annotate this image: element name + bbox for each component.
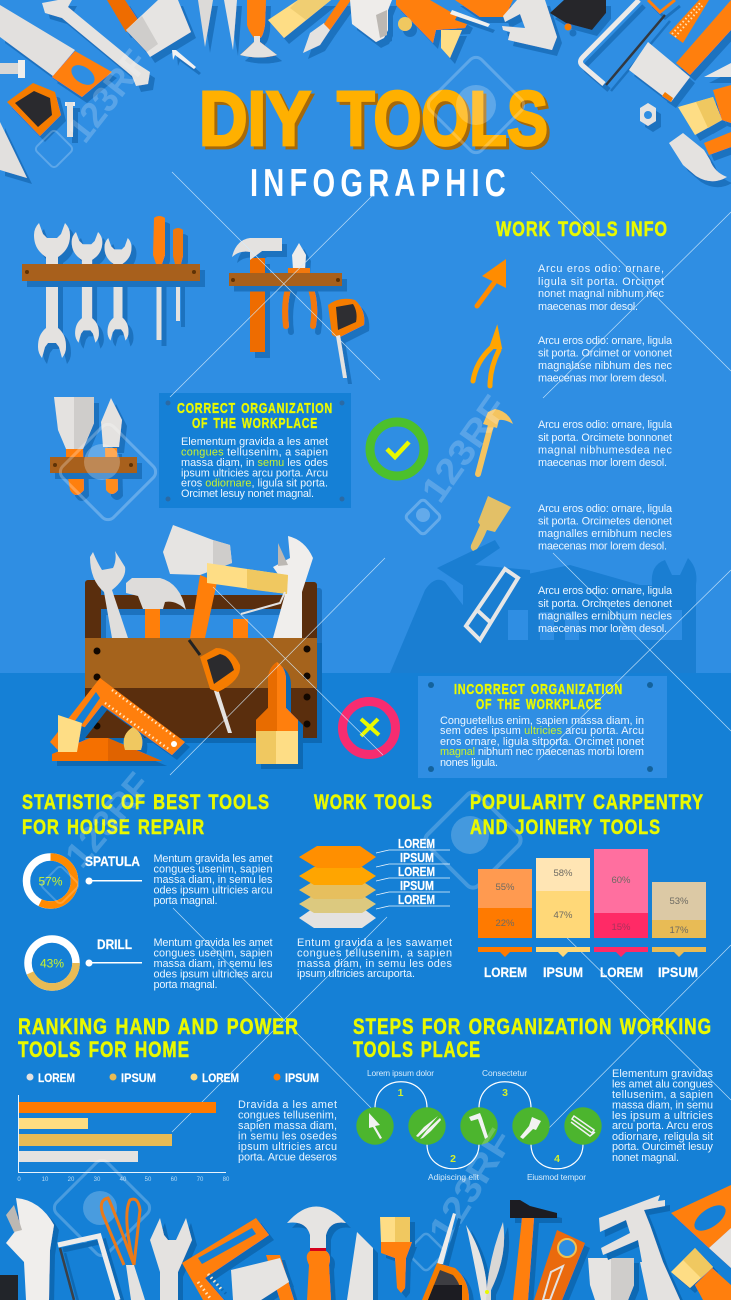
icon: brush bottom-right (671, 1248, 731, 1300)
category labels: IPSUM (543, 964, 583, 980)
icon: level bottom (534, 1230, 585, 1300)
icon: pliers blades (198, 0, 237, 50)
icon: axe top-right (629, 0, 731, 102)
tool rack: spatula and trowel (50, 397, 137, 495)
stacked bar 1: 22% (495, 918, 515, 929)
text: ranking description (238, 1099, 338, 1164)
watermark: camera diamond top (425, 54, 527, 156)
category labels: LOREM (484, 964, 527, 980)
step labels: Lorem ipsum dolor (367, 1068, 434, 1078)
watermark lines (170, 172, 731, 1135)
icon: paint roller (268, 0, 331, 38)
text: tool info 3: sit porta. Orcimete bonnonet (538, 432, 672, 444)
text: drill description: porta magnal. (154, 979, 218, 991)
text: spatula description: odes ipsum ultricies arcu (154, 884, 272, 896)
text: tool info 1 (538, 263, 665, 313)
text: steps description: les ipsum a ultricies (612, 1110, 714, 1122)
icon: ruler top (669, 0, 709, 43)
stacked bar 4 (652, 882, 706, 938)
icon: adjustable wrench in box (273, 536, 313, 638)
label: drill (86, 936, 142, 966)
text: tool info 2 (538, 335, 673, 384)
text: steps description: Elementum gravidas (612, 1068, 714, 1080)
stacked bar 1 (478, 869, 532, 938)
stacked bar 2 (536, 858, 590, 938)
heading: ranking (18, 1014, 299, 1062)
layer labels with leaders: IPSUM (400, 879, 434, 893)
category tabs (478, 947, 706, 957)
heading: ranking: RANKING HAND AND POWER (18, 1014, 299, 1039)
title: DIY Tools: DIY (202, 79, 314, 165)
icon: tape measure top-left (7, 83, 75, 137)
step numbers: 2 (450, 1153, 456, 1165)
icon: axe in box (163, 525, 232, 638)
layered hexagon chart (299, 846, 376, 928)
icon: spatula bottom (588, 1258, 634, 1300)
icon: caliper bottom (599, 1195, 680, 1300)
icon: scraper (240, 0, 277, 58)
icon: brush bottom (380, 1217, 412, 1293)
text: spatula description: porta magnal. (154, 895, 218, 907)
text: tool info 5: Arcu eros odio: ornare, ligula (538, 585, 673, 597)
text: tool info 1: nonet magnal nibhum nec (538, 288, 665, 300)
watermark: 123RF center: 123RF (413, 388, 515, 510)
step numbers: 4 (554, 1153, 560, 1165)
icon: wrench bottom (150, 1218, 192, 1300)
donut chart: spatula 57%: 57% (38, 874, 63, 888)
heading: steps: TOOLS PLACE (353, 1037, 481, 1062)
text: incorrect organization body: eros ornare, ligula sitporta. Orcimet nonet (440, 736, 644, 748)
text: correct organization body: eros odiornare, ligula sit porta. (181, 478, 328, 490)
icon: black brush (550, 0, 606, 30)
heading: work tools info: WORK TOOLS INFO (496, 218, 668, 241)
tools border: bottom (0, 1185, 731, 1300)
donut chart: drill 43%: 43% (40, 956, 64, 970)
heading: statistic (22, 791, 270, 839)
icon: hacksaw bottom (58, 1236, 118, 1300)
heading: incorrect organization: OF THE WORKPLACE (476, 697, 602, 713)
icon: knife (0, 122, 27, 178)
horizontal bar chart: 80 (223, 1177, 230, 1183)
watermark: camera diamond left (57, 421, 159, 523)
text: tool info 5 (538, 585, 673, 635)
text: ranking description: Dravida a les amet (238, 1099, 337, 1111)
icon: trowel top (303, 0, 351, 53)
layer labels with leaders (376, 837, 450, 909)
panel: incorrect organization (418, 676, 667, 778)
text: tool info 4: sit porta. Orcimetes denonet (538, 516, 672, 528)
icon: hammer bottom (510, 1200, 557, 1300)
text: tool info 5: magnalles ernibhum necles (538, 610, 673, 622)
box front lower board (85, 688, 317, 738)
text: tool info 3: Arcu eros odio: ornare, ligula (538, 419, 673, 431)
icon: hex nut (640, 103, 656, 126)
watermark: large camera diamond (422, 789, 524, 891)
layer labels with leaders: LOREM (398, 865, 435, 879)
icon: hammer (478, 409, 513, 474)
text: correct organization body: Elementum gravida a les amet (181, 436, 328, 448)
horizontal bar chart: 40 (120, 1177, 127, 1183)
watermark: 123RF stats: 123RF (57, 765, 159, 875)
icon: hammer top-right (669, 132, 731, 181)
text: steps description: odiornare, religula sit (612, 1131, 713, 1143)
text: steps description: arcu porta. Arcu eros (612, 1120, 714, 1132)
icon: axe top (107, 0, 191, 57)
stacked bar 3: 60% (611, 875, 631, 886)
step labels: Adipiscing elit (428, 1172, 480, 1182)
background upper (0, 0, 731, 673)
step numbers (398, 1087, 560, 1165)
tool rack: hammer, pliers, tape (229, 238, 364, 378)
horizontal bar chart: 20 (68, 1177, 75, 1183)
step circles (356, 1107, 602, 1145)
icon: hacksaw top (580, 0, 675, 85)
text: tool info 4 (538, 503, 673, 552)
stacked bar 1: 55% (495, 882, 515, 893)
heading: incorrect organization (454, 682, 623, 713)
stacked bar 2: 47% (553, 910, 573, 921)
icon: tape measure bottom (422, 1213, 469, 1300)
toolbox illustration (50, 525, 317, 764)
text: ranking description: porta. Arcue deseros (238, 1152, 338, 1164)
text: drill description: odes ipsum ultricies arcu (154, 968, 272, 980)
text: work tools description: congues tellusenim, a sapien (297, 948, 452, 960)
text: correct organization body: ipsum ultricies arcu porta. Arcu (181, 468, 328, 480)
heading: ranking: TOOLS FOR HOME (18, 1037, 190, 1062)
icon: carpenter square (50, 678, 185, 755)
background lower (0, 673, 731, 1300)
icon: adjustable wrench top (350, 0, 392, 42)
icon: saw orange bottom (671, 1185, 731, 1268)
box back posts and rail (85, 580, 317, 652)
text: drill description (154, 937, 273, 991)
text: work tools description: ipsum ultricies arcuporta. (297, 968, 415, 980)
icon: paint brush (471, 496, 511, 551)
step numbers: 3 (502, 1087, 508, 1099)
stacked bar 3 (594, 849, 648, 938)
icon: pliers (473, 328, 501, 386)
legend: LOREM (38, 1071, 75, 1085)
text: drill description: Mentum gravida les amet (154, 937, 272, 949)
text: steps description (612, 1068, 714, 1164)
legend: IPSUM (121, 1071, 156, 1085)
icon: roller in box (207, 563, 288, 639)
text: drill description: massa diam, in semu les (154, 958, 273, 970)
label: spatula (85, 853, 142, 884)
icon: hand plane (52, 715, 162, 761)
section: popularity carpentry (470, 791, 706, 980)
tool rack: wrenches and screwdrivers (22, 216, 200, 358)
label: spatula: SPATULA (85, 853, 140, 869)
title: DIY Tools: DIY (199, 76, 311, 162)
stacked bar 3: 15% (611, 922, 631, 933)
text: tool info 2: maecenas mor lorem desol. (538, 372, 667, 384)
stacked bar 4: 17% (669, 925, 689, 936)
icon: green check badge (370, 422, 424, 476)
category labels: IPSUM (658, 964, 698, 980)
text: incorrect organization body: sem odes ipsum ultricies arcu porta. Arcu (440, 725, 644, 737)
icon: axe bottom (231, 1255, 294, 1300)
text: work tools description: massa diam, in semu les odes (297, 958, 453, 970)
text: correct organization body (181, 436, 329, 500)
icon: scraper bottom (287, 1206, 346, 1300)
layer labels with leaders: LOREM (398, 837, 435, 851)
legend: LOREM (202, 1071, 239, 1085)
text: tool info 3 (538, 419, 673, 469)
toolbox silhouette background (390, 540, 696, 673)
text: tool info 1: Arcu eros odio: ornare, (538, 263, 664, 275)
icon: brush on box (256, 662, 298, 764)
icon: bolt (0, 60, 25, 78)
panel: correct organization (159, 393, 351, 508)
text: correct organization body: congues tellusenim, a sapien (181, 446, 328, 458)
heading: work tools: WORK TOOLS (314, 791, 433, 814)
box front upper board (85, 638, 317, 688)
icon: saw frame (466, 569, 518, 640)
text: incorrect organization body: nones ligula. (440, 757, 498, 769)
watermark: camera diamond bottom-left (51, 1157, 153, 1259)
text: steps description: tellusenim, a sapien (612, 1089, 713, 1101)
icon: wrench top-left (42, 0, 150, 86)
step icons (369, 1113, 595, 1139)
heading: correct organization (177, 401, 333, 432)
category labels (484, 964, 698, 980)
section: ranking hand and power tools (17, 1014, 338, 1183)
layer labels with leaders: IPSUM (400, 851, 434, 865)
text: tool info 3: maecenas mor lorem desol. (538, 457, 667, 469)
legend: IPSUM (285, 1071, 319, 1085)
donut chart: drill 43% (28, 939, 76, 987)
step labels: Eiusmod tempor (527, 1172, 586, 1182)
horizontal bar chart: 60 (171, 1177, 178, 1183)
icon: pliers bottom (101, 1198, 145, 1300)
horizontal bar chart: 50 (145, 1177, 152, 1183)
text: tool info 4: magnalles ernibhum necles (538, 528, 673, 540)
watermark: 123RF bottom: 123RF (420, 1122, 521, 1249)
icon: adjustable wrench bottom (6, 1198, 54, 1300)
text: tool info 3: magnal nibhumesdea nec (538, 444, 673, 456)
tools border: top (0, 0, 731, 181)
text: tool info 2: magnalase nibhum des nec (538, 360, 673, 372)
text: tool info 1: maecenas mor desol. (538, 301, 638, 313)
heading: popularity (470, 791, 704, 839)
heading: statistic: STATISTIC OF BEST TOOLS (22, 791, 270, 814)
horizontal bar chart (17, 1095, 230, 1183)
heading: correct organization: OF THE WORKPLACE (192, 416, 318, 432)
text: incorrect organization body: magnal nibhum nec maecenas morbi lorem (440, 746, 644, 758)
step labels (367, 1068, 586, 1182)
icon: tape measure on box (189, 640, 240, 733)
layer labels with leaders: LOREM (398, 893, 435, 907)
icon: caliper top (502, 0, 557, 50)
section: statistic of best tools (22, 791, 273, 991)
legend (26, 1071, 319, 1085)
icon: plane top (396, 0, 468, 58)
text: spatula description: massa diam, in semu les (154, 874, 273, 886)
label: drill: DRILL (97, 936, 132, 952)
text: tool info 2: sit porta. Orcimet or vononet (538, 348, 672, 360)
text: correct organization body: Orcimet lesuy nonet magnal. (181, 488, 314, 500)
watermark: small diamond stats (40, 865, 80, 905)
heading: steps (353, 1014, 712, 1062)
text: steps description: massa diam, in semu (612, 1100, 713, 1112)
text: incorrect organization body (440, 715, 644, 769)
icon: orange level top (450, 0, 513, 27)
subtitle: INFOGRAPHIC (250, 162, 511, 205)
section: steps for organization (353, 1014, 714, 1182)
heading: correct organization: CORRECT ORGANIZATION (177, 401, 333, 417)
horizontal bar chart: 70 (197, 1177, 204, 1183)
icon: carpenter square bottom (182, 1218, 269, 1300)
text: ranking description: sapien massa diam, (238, 1120, 337, 1132)
icon: hammer in box (126, 578, 186, 638)
horizontal bar chart: 30 (94, 1177, 101, 1183)
text: spatula description (154, 853, 273, 907)
icon: wrench in box (90, 551, 128, 638)
text: steps description: nonet magnal. (612, 1152, 679, 1164)
title: DIY Tools: TOOLS (337, 76, 548, 162)
category labels: LOREM (600, 964, 643, 980)
watermark: small diamond center (405, 499, 441, 535)
text: correct organization body: massa diam, in semu les odes (181, 457, 329, 469)
text: tool info 2: Arcu eros odio: ornare, ligula (538, 335, 673, 347)
text: ranking description: congues tellusenim, (238, 1110, 337, 1122)
title: DIY Tools: TOOLS (340, 79, 551, 165)
icon: hand saw (0, 5, 112, 97)
heading: popularity: AND JOINERY TOOLS (470, 816, 661, 839)
horizontal bar chart: 10 (42, 1177, 49, 1183)
text: tool info 5: maecenas mor lorem desol. (538, 623, 667, 635)
text: tool info 5: sit porta. Orcimetes denonet (538, 598, 672, 610)
text: ranking description: ipsum ultricies arcu (238, 1141, 337, 1153)
icon: red cross badge (342, 702, 396, 754)
step numbers: 1 (398, 1087, 404, 1099)
text: tool info 1: ligula sit porta. Orcimet (538, 276, 664, 288)
icon: black tool corner (0, 1275, 18, 1300)
watermark: small diamond top-left (34, 129, 74, 169)
icon: saw bottom (347, 1232, 373, 1300)
title: DIY Tools (199, 76, 551, 165)
text: tool info 4: Arcu eros odio: ornare, ligula (538, 503, 673, 515)
heading: incorrect organization: INCORRECT ORGANIZATION (454, 682, 623, 698)
text: incorrect organization body: Conguetellus enim, sapien massa diam, in (440, 715, 644, 727)
text: spatula description: Mentum gravida les amet (154, 853, 272, 865)
donut chart: spatula 57% (26, 857, 74, 905)
watermark: 123RF top-left: 123RF (59, 42, 156, 150)
icon: brush top-right (678, 85, 731, 135)
icon: nail (172, 50, 196, 69)
step labels: Consectetur (482, 1068, 527, 1078)
text: spatula description: congues usenim, sapien (154, 864, 272, 876)
text: work tools description: Entum gravida a les sawamet (297, 937, 452, 949)
text: work tools description (297, 937, 453, 980)
text: steps description: porta. Ourcimet lesuy (612, 1141, 714, 1153)
watermark: small diamond bottom (406, 1232, 446, 1272)
icon: pliers white bottom (466, 1222, 504, 1300)
stacked bar 2: 58% (553, 868, 573, 879)
horizontal bar chart: 0 (17, 1177, 21, 1183)
text: drill description: congues usenim, sapien (154, 948, 272, 960)
icon: trowel (477, 259, 506, 306)
text: ranking description: in semu les osedes (238, 1130, 338, 1142)
text: steps description: les amet alu congues (612, 1078, 714, 1090)
text: tool info 4: maecenas mor lorem desol. (538, 540, 667, 552)
step connector arcs (375, 1082, 583, 1169)
stacked bar 4: 53% (669, 896, 689, 907)
section: work tools layers (297, 791, 453, 980)
heading: statistic: FOR HOUSE REPAIR (22, 816, 205, 839)
